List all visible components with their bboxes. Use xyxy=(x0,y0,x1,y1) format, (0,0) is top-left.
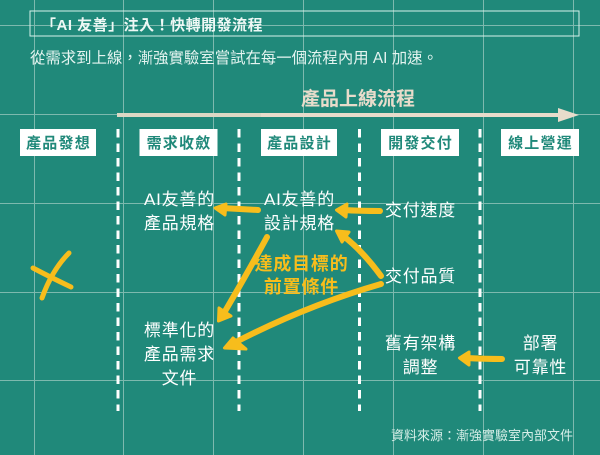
arrow: reliability to legacy architecture xyxy=(460,352,502,365)
stage label: product ideation: 產品發想 xyxy=(26,134,91,152)
process heading: 產品上線流程 xyxy=(301,87,415,110)
callout: prerequisite for goal: 達成目標的 xyxy=(254,253,348,274)
text: legacy architecture adjustment xyxy=(385,334,456,377)
arrow: design spec to requirement doc xyxy=(218,237,267,321)
stage label: requirements: 需求收斂 xyxy=(147,134,211,152)
arrow: delivery quality to design spec xyxy=(336,231,381,276)
text: deployment reliability: 部署 xyxy=(523,334,558,353)
text: delivery speed: 交付速度 xyxy=(385,201,456,220)
stage label: online operations: 線上營運 xyxy=(508,134,573,152)
text: AI-friendly product spec xyxy=(144,190,215,233)
title: 「AI 友善」注入！快轉開發流程 xyxy=(41,16,263,34)
subtitle: 從需求到上線，漸強實驗室嘗試在每一個流程內用 AI 加速。 xyxy=(30,48,438,67)
text: source: 資料來源：漸強實驗室內部文件 xyxy=(391,428,573,443)
arrow: product timeline xyxy=(117,108,579,122)
arrow: design spec to product spec xyxy=(215,204,258,215)
title xyxy=(30,11,579,36)
text: standardized requirement doc: 文件 xyxy=(162,369,197,388)
text: AI-friendly design spec xyxy=(264,190,335,233)
text: deployment reliability: 可靠性 xyxy=(514,358,567,377)
text: deployment reliability xyxy=(514,334,567,377)
text: standardized requirement doc: 標準化的 xyxy=(144,321,215,340)
stage label: product design xyxy=(261,129,337,156)
text: legacy architecture adjustment: 舊有架構 xyxy=(385,334,456,353)
text: delivery quality: 交付品質 xyxy=(385,267,456,286)
text: AI-friendly product spec: 產品規格 xyxy=(144,214,215,233)
arrow: delivery speed to design spec xyxy=(336,204,380,217)
text: standardized requirement doc xyxy=(144,321,215,388)
text: AI-friendly product spec: AI友善的 xyxy=(144,190,215,209)
icon: yellow cross xyxy=(33,253,71,298)
stage label: development delivery xyxy=(381,129,459,156)
callout: prerequisite for goal: 前置條件 xyxy=(264,277,339,297)
text: standardized requirement doc: 產品需求 xyxy=(144,345,215,364)
stage label: product ideation xyxy=(20,129,96,156)
text: legacy architecture adjustment: 調整 xyxy=(403,358,438,377)
text: AI-friendly design spec: AI友善的 xyxy=(264,190,335,209)
stage label: development delivery: 開發交付 xyxy=(388,134,453,152)
stage label: product design: 產品設計 xyxy=(267,134,332,152)
stage label: requirements xyxy=(140,129,218,156)
callout: prerequisite for goal xyxy=(254,253,348,297)
arrow: delivery quality to requirement doc xyxy=(224,284,381,349)
text: AI-friendly design spec: 設計規格 xyxy=(264,214,335,233)
stage label: online operations xyxy=(501,129,579,156)
